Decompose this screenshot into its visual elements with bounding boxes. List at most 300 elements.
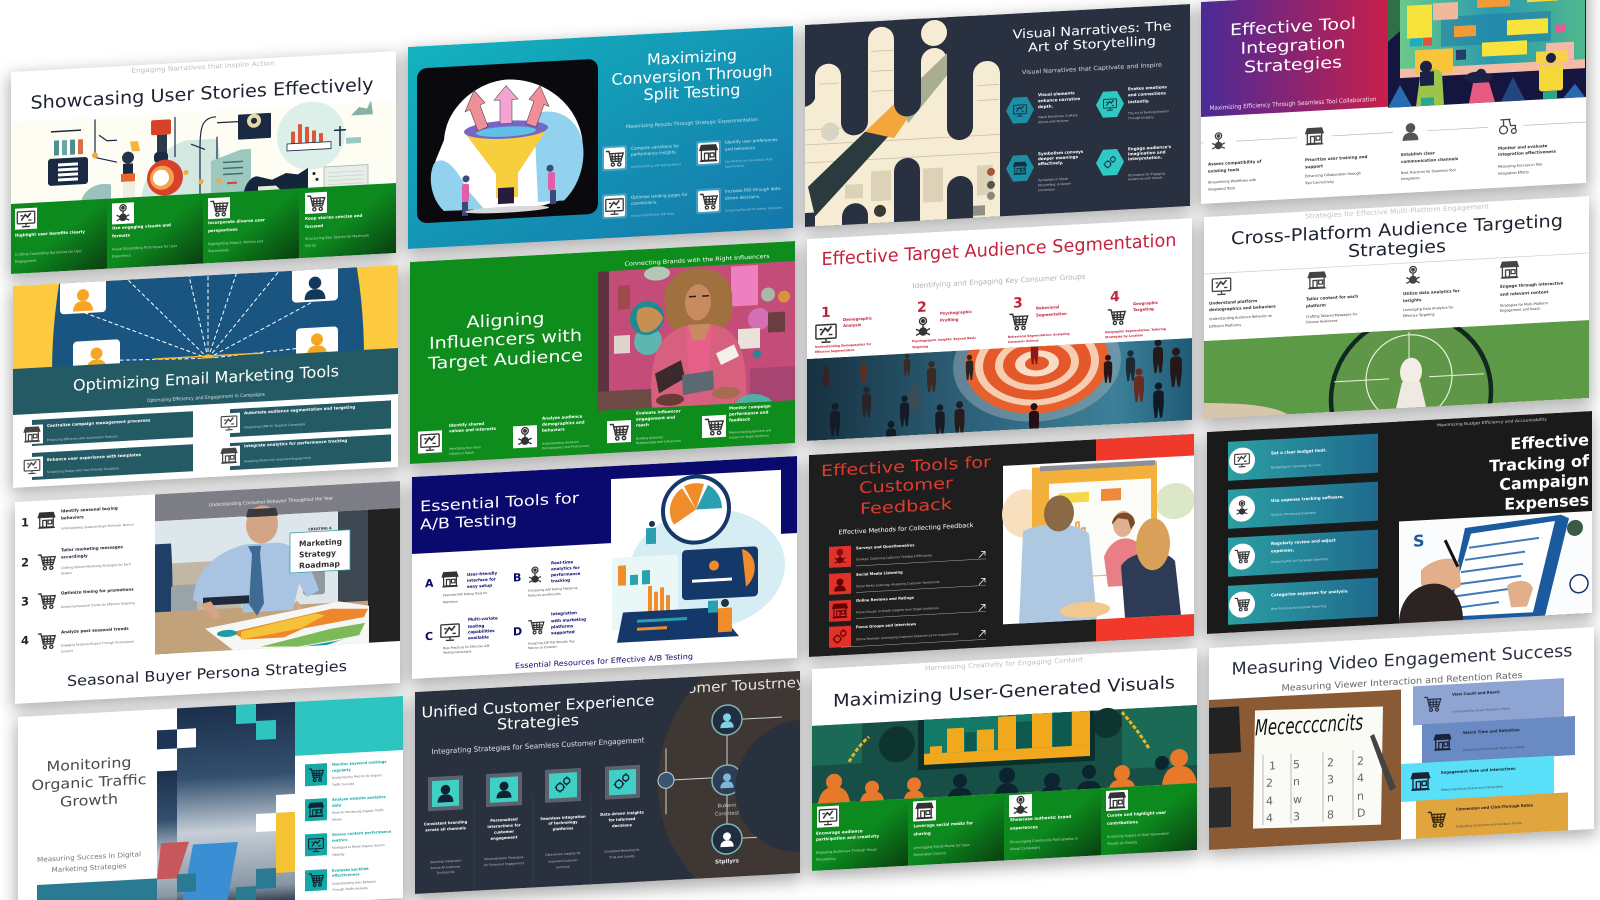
connector lines xyxy=(1201,122,1586,143)
item 3: Visual Campaigns xyxy=(1010,846,1040,851)
item 1: 1 xyxy=(21,515,29,530)
subtitle: Maximizing Budget Efficiency and Accountability xyxy=(1437,416,1548,427)
step 4: Trust and Loyalty xyxy=(608,854,635,859)
item 1: Identify seasonal buying xyxy=(61,505,118,513)
item 4: Measuring Success in Tool xyxy=(1498,162,1542,169)
row 3 xyxy=(829,592,986,622)
item 2: Leverage social media for xyxy=(914,820,973,828)
item 2: Identify user preferences xyxy=(725,137,777,145)
photo: notepad on desk: 4 xyxy=(1266,812,1273,825)
item 2: Enhance user experience with templates xyxy=(47,452,142,462)
roadmap card: Roadmap xyxy=(299,559,340,571)
item 1 xyxy=(1006,92,1080,124)
step 3: platforms xyxy=(553,825,574,831)
photo: notepad on desk: 1 xyxy=(1269,759,1276,773)
title: Growth xyxy=(60,792,118,811)
item 3: Evaluate influencer xyxy=(636,408,681,416)
step 4: Data-driven insights xyxy=(600,809,645,817)
row 3: Online Reviews and Ratings xyxy=(856,596,915,603)
item 1 xyxy=(21,505,134,533)
item 1: behaviors xyxy=(61,514,84,520)
item 1: Integrated Tools xyxy=(1208,186,1235,192)
photo: notepad on desk: w xyxy=(1293,793,1302,806)
title: Effective Target Audience Segmentation xyxy=(822,230,1177,270)
item 3: perspectives xyxy=(208,227,238,233)
item 4: Impact on Target Audience xyxy=(729,433,769,440)
item C: Multi-variate xyxy=(468,615,498,622)
item D: Analyzing A/B Test Results: Key xyxy=(528,639,575,646)
step 2 xyxy=(912,297,976,349)
item 1: Visual elements xyxy=(1038,90,1075,97)
item 2: Key Metrics for Conversion Rate xyxy=(725,157,773,164)
subtitle: Optimizing Efficiency and Engagement in Campaigns xyxy=(147,392,266,404)
item 2 xyxy=(1306,270,1358,324)
title: Expenses xyxy=(1504,490,1589,514)
item 3: Strategies to Boost Organic Search xyxy=(332,843,385,850)
item 3: Relationships with Influencers xyxy=(636,439,681,445)
title: Feedback xyxy=(860,494,953,518)
title: Tracking of xyxy=(1489,451,1590,476)
step 1: Effective Segmentation xyxy=(815,348,855,354)
footer caption: Essential Resources for Effective A/B Testing xyxy=(515,652,693,670)
bar 3: expenses. xyxy=(1271,547,1295,554)
item 3: conversions. xyxy=(631,199,657,206)
row 1 xyxy=(829,538,986,568)
title: Campaign xyxy=(1499,470,1589,494)
item B: tracking xyxy=(551,577,570,583)
item 4: 4 xyxy=(21,633,29,648)
row 2: Social Media Listening: Analyzing Customer Sentiments xyxy=(856,580,940,588)
row 1: Surveys and Questionnaires xyxy=(856,543,915,550)
image: crowd around target xyxy=(807,297,1192,459)
item 3 xyxy=(1009,791,1078,851)
item A: Essential A/B Testing Tools for xyxy=(443,591,488,597)
item 2: Generated Content xyxy=(914,851,947,857)
step 1 xyxy=(424,775,468,876)
title: Strategies xyxy=(497,711,579,734)
step 1: Demographic xyxy=(843,315,873,322)
item 3 xyxy=(607,408,681,447)
slide 11: Effective Tools for Customer Feedback xyxy=(809,434,1195,657)
step 3: 3 xyxy=(1013,295,1023,312)
step 3: Consumer Actions xyxy=(1008,338,1039,344)
item 2: formats xyxy=(112,232,131,238)
card 2: Analyzing Click-Through Rates for Videos xyxy=(1463,745,1525,752)
title: Influencers with xyxy=(429,326,582,353)
item 2 xyxy=(513,413,589,452)
item 1 xyxy=(1208,130,1262,192)
item 3: Best Practices for Seamless Tool xyxy=(1401,168,1456,175)
bottom-left block xyxy=(37,878,157,900)
feature columns xyxy=(11,183,396,274)
step 1: Seamless Integration xyxy=(430,858,462,864)
subtitle: Measuring Viewer Interaction and Retention Rates xyxy=(1282,671,1523,694)
item 3: Incorporate diverse user xyxy=(208,217,265,225)
item 2: Tailor content for each xyxy=(1306,294,1358,301)
item 4: focused xyxy=(305,223,323,229)
item 1: Understanding A/B Testing Basics xyxy=(631,162,682,169)
title: Visual Narratives: The xyxy=(1013,18,1172,42)
roadmap card xyxy=(290,525,350,573)
photo: notepad on desk: D xyxy=(1357,806,1365,820)
item 1: Influencer Match xyxy=(449,451,474,456)
title: Maximizing User-Generated Visuals xyxy=(833,673,1175,712)
item 3: Optimize timing for promotions xyxy=(61,587,134,595)
card 4 xyxy=(1416,792,1568,839)
item 4: performance and xyxy=(729,409,769,417)
item 1: Analyzing Key Metrics for Organic xyxy=(332,773,383,780)
photo: notepad on desk: 3 xyxy=(1293,810,1300,823)
item 1: Understand platform xyxy=(1209,298,1257,306)
item 4: Engage audience's xyxy=(1128,144,1172,151)
bar 1: Set a clear budget limit. xyxy=(1271,447,1327,456)
title: Conversion Through xyxy=(612,62,772,89)
bar 4: Categorize expenses for analysis. xyxy=(1271,588,1349,598)
item 3: Symbolism in Visual xyxy=(1038,177,1068,182)
item 4: Structuring User Stories for Maximum xyxy=(305,233,370,241)
item 1: participation and creativity xyxy=(816,833,879,842)
item 4 xyxy=(1498,117,1556,176)
item 3: metrics xyxy=(332,838,348,843)
item B: Features and Benefits xyxy=(528,592,561,598)
item 2 xyxy=(1304,126,1368,185)
item 4 xyxy=(305,866,377,893)
subtitle: Measuring Success in Digital xyxy=(37,850,141,864)
subtitle: Maximizing Efficiency Through Seamless Tool Collaboration xyxy=(1209,96,1377,112)
item 1: values and interests xyxy=(449,426,497,433)
item 2 xyxy=(112,200,178,258)
item 4 xyxy=(702,403,771,441)
item 3 xyxy=(1006,150,1083,192)
item A: User-friendly xyxy=(467,570,497,577)
photo: man at table with roadmap xyxy=(155,500,369,654)
title: A/B Testing xyxy=(420,511,517,534)
photo: notepad on desk: 2 xyxy=(1266,777,1273,790)
roadmap card: CREATING A xyxy=(308,526,332,532)
item 1: enhance narrative xyxy=(1038,96,1080,103)
item 4: Analyzing Impact of User-Generated xyxy=(1107,832,1169,839)
illustration: machinery xyxy=(11,97,396,208)
bar 2: Tools for Monitoring Expenses xyxy=(1270,511,1316,517)
item 2: Understanding Audience xyxy=(542,440,579,446)
title band xyxy=(13,348,398,415)
item 1: Crafting Compelling Narratives for User xyxy=(15,249,82,257)
step 2: for Enhanced Engagement xyxy=(484,861,525,867)
step 2: Psychographic Insights: Beyond Basic xyxy=(912,336,976,343)
slide 1: Showcasing User Stories xyxy=(11,51,396,274)
bar 4 xyxy=(1228,578,1378,625)
item B: Real-time xyxy=(551,559,573,565)
item 3 xyxy=(305,830,392,858)
step 1: across all channels xyxy=(425,825,467,832)
item 2: Visual Storytelling Techniques for User xyxy=(112,244,178,251)
title: Monitoring xyxy=(46,755,132,775)
row 4 xyxy=(829,618,986,648)
item 1: performance insights. xyxy=(631,149,677,157)
row 2: Social Media Listening xyxy=(856,570,903,577)
item 2: Optimization xyxy=(725,164,744,169)
item 4: Engage through interactive xyxy=(1500,280,1564,289)
item 4: Increase ROI through data- xyxy=(725,186,782,194)
item 4: imagination and xyxy=(1128,149,1166,156)
item 4 xyxy=(218,434,391,471)
item 3: Utilize data analytics for xyxy=(1403,288,1460,296)
item 3: Establish clear xyxy=(1401,150,1435,157)
item 4 xyxy=(696,185,782,214)
card 2: Watch Time and Retention xyxy=(1463,727,1520,735)
blurred photo with pixel squares xyxy=(157,702,295,900)
navy header xyxy=(412,456,797,554)
slide 8: Cross-Platform Audience Targeting xyxy=(1204,196,1589,487)
item 2: Analyze audience xyxy=(542,414,583,421)
pill collage image xyxy=(805,16,1000,227)
item 3: Highlighting Impact: Metrics and xyxy=(208,239,263,246)
photo: notepad on desk: n xyxy=(1327,791,1334,805)
item 2: Tools for Monitoring Organic Traffic xyxy=(331,808,384,815)
item 2: Evokes emotions xyxy=(1128,84,1167,91)
step 2 xyxy=(484,772,525,867)
step 4 xyxy=(600,764,645,860)
photo: notepad on desk: n xyxy=(1293,775,1300,788)
subtitle xyxy=(37,850,141,875)
item 1: Enhancing Efficiency with Automation Features xyxy=(47,434,118,442)
item 3: Effective Targeting xyxy=(1403,312,1435,318)
item 4: Techniques for Engaging xyxy=(1127,171,1165,177)
step 4: decisions xyxy=(612,822,633,828)
item 4: Curate and highlight user xyxy=(1107,810,1166,818)
roadmap card: Marketing xyxy=(299,537,342,549)
item 3: 3 xyxy=(21,594,29,609)
item 4: Strategies for Multi-Platform xyxy=(1500,301,1549,308)
photo: notepad on desk: 4 xyxy=(1266,795,1273,808)
slide 9: Seasonal Buyer Persona Strategies xyxy=(15,481,400,704)
photo: influencer xyxy=(598,259,795,411)
item 2: Demographics and Preferences xyxy=(542,444,589,450)
bar 3: Analyzing ROI on Campaign Spending xyxy=(1271,557,1328,564)
subtitle: Understanding Consumer Behavior Throughout the Year xyxy=(209,496,333,508)
title: Seasonal Buyer Persona Strategies xyxy=(67,659,347,690)
item B: analytics for xyxy=(551,565,580,571)
item 3: deeper meanings xyxy=(1038,154,1079,161)
subtitle: Visual Narratives that Captivate and Inspire xyxy=(1022,63,1162,76)
step 1: Consistent branding xyxy=(424,819,468,827)
item A xyxy=(425,570,497,605)
item 4: Analyze past seasonal trends xyxy=(61,626,129,634)
photo: notepad on desk: 5 xyxy=(1293,758,1300,771)
item A: interface for xyxy=(467,576,496,583)
item 2: Simplifying Design with User-Friendly Templates xyxy=(47,466,119,474)
item 2: data xyxy=(332,803,342,808)
item 3 xyxy=(602,190,688,219)
item 1: Encourage audience xyxy=(816,828,863,836)
step 4: Strategies by Location xyxy=(1105,333,1143,339)
journey map image: Customer Toustrney xyxy=(653,675,805,699)
slide 7: Effective Target Audience Segmentation xyxy=(807,218,1192,459)
journey map image: Corontest xyxy=(715,810,739,818)
item 4: Clarity xyxy=(305,243,316,248)
photo: notepad on desk: 8 xyxy=(1327,808,1334,822)
item 3: Analyzing Seasonal Trends for Effective Targeting xyxy=(61,601,135,609)
slide 10: Essential Tools for A/B Testing xyxy=(412,456,797,679)
item 2: sharing xyxy=(914,831,931,836)
item C: available xyxy=(468,634,489,640)
title: Showcasing User Stories Effectively xyxy=(31,74,374,114)
item 3: Showcase authentic brand xyxy=(1010,814,1071,822)
item 3: engagement and xyxy=(636,415,675,422)
item 1 xyxy=(15,205,85,264)
subtitle: Harnessing Creativity for Engaging Content xyxy=(925,656,1083,672)
item 4: Visuals on Brands xyxy=(1107,840,1137,846)
item B: Comparing A/B Testing Platforms: xyxy=(528,586,578,593)
feature columns xyxy=(812,783,1197,871)
item D: platforms xyxy=(551,623,574,629)
step 4 xyxy=(1105,286,1166,339)
item 1 xyxy=(602,142,682,171)
item A: easy setup xyxy=(467,583,492,589)
photo: notepad on desk xyxy=(1209,690,1401,850)
item 1: Highlight user benefits clearly xyxy=(15,229,85,238)
card 4: Evaluating Comments and Feedback Trends xyxy=(1456,821,1522,829)
title: Split Testing xyxy=(643,81,740,104)
item 2: The Art of Evoking Emotion xyxy=(1127,109,1169,115)
item 4: and relevant content xyxy=(1500,289,1549,297)
title xyxy=(821,452,992,520)
item C: testing xyxy=(468,623,484,629)
subtitle: Strategies for Effective Multi-Platform Engagement xyxy=(1305,202,1489,220)
item 4: Measuring Engagement and xyxy=(729,428,771,435)
title xyxy=(427,307,583,373)
item 2: behaviors xyxy=(542,427,565,433)
step 4: Consistent Branding for xyxy=(604,848,641,854)
slide 13: Monitoring Organic Traffic Growth xyxy=(18,696,403,900)
step 1 xyxy=(815,302,873,354)
title xyxy=(32,754,147,812)
journey map image: Stpllyrs xyxy=(715,858,740,866)
item 2: Experience xyxy=(112,253,131,258)
title xyxy=(1231,211,1563,269)
item 1: Monitor keyword rankings xyxy=(332,760,387,767)
item 2 xyxy=(913,798,973,857)
illustration: wall of screens xyxy=(1388,0,1586,108)
item 4 xyxy=(1500,259,1564,313)
item 4: Engagement and Reach xyxy=(1500,307,1541,313)
item 2: Crafting Tailored Marketing Strategies for Each xyxy=(61,562,131,570)
subtitle: Engaging Narratives that Inspire Action xyxy=(132,59,275,75)
item 3: Assess content performance xyxy=(332,830,392,837)
item 2 xyxy=(1096,86,1169,120)
teal corner block xyxy=(295,696,403,756)
subtitle: Maximizing Results Through Strategic Experimentation xyxy=(626,117,758,130)
item 3 xyxy=(21,586,135,611)
item 1: regularly xyxy=(332,768,351,773)
step 2: Personalization Strategies xyxy=(484,855,524,861)
card 3: Engagement Rate and Interactions xyxy=(1441,766,1516,775)
title: Unified Customer Experience xyxy=(421,691,654,722)
step 2: 2 xyxy=(917,299,927,316)
item 4: Engaging Seasonal Buyers Through Personalized xyxy=(61,640,134,647)
bar 2 xyxy=(1228,482,1378,529)
item 3: Integrating CRM for Targeted Campaigns xyxy=(244,422,306,429)
title: Strategies xyxy=(1244,52,1342,77)
item 2: support xyxy=(1305,163,1323,169)
image: magnifier and pawn xyxy=(1204,306,1589,487)
step 4: Geographic xyxy=(1133,300,1159,306)
item 1 xyxy=(1209,276,1276,329)
title: Cross-Platform Audience Targeting xyxy=(1231,211,1563,250)
item 3: effectively. xyxy=(1038,160,1064,166)
item 1 xyxy=(418,420,497,458)
step 3: Journeys xyxy=(556,865,570,869)
item 4: Monitor and evaluate xyxy=(1498,143,1548,151)
dark side block xyxy=(368,508,400,643)
step 2: Targeting xyxy=(912,344,928,349)
row 1: Surveys: Capturing Customer Feedback Effectively xyxy=(856,553,932,561)
bar 3: Regularly review and adjust xyxy=(1271,537,1336,546)
item 3: Symbolism conveys xyxy=(1038,149,1084,156)
step 3: Behavioral Segmentation: Analyzing xyxy=(1008,332,1070,339)
roadmap card: Strategy xyxy=(299,549,336,560)
title: Organic Traffic xyxy=(32,772,147,794)
row 4: Focus Groups and Interviews xyxy=(856,622,917,629)
item 1: Storytelling xyxy=(816,857,835,862)
item 4 xyxy=(1106,788,1169,846)
item 1: Engagement xyxy=(15,259,37,264)
item 2 xyxy=(21,444,193,481)
item 3 xyxy=(207,195,265,253)
card 4: Conversion and Click-Through Rates xyxy=(1456,802,1534,812)
item 1: existing tools xyxy=(1208,167,1240,174)
title: Strategies xyxy=(1348,237,1446,262)
item 3: Analyzing Effective A/B Tests xyxy=(631,211,675,218)
subtitle: Identifying and Engaging Key Consumer Groups xyxy=(912,272,1086,290)
slide 4: Effective Tool Integration xyxy=(1201,0,1586,204)
card 3 xyxy=(1401,756,1554,802)
item 4: Content xyxy=(61,649,74,653)
item 2: accordingly xyxy=(61,553,88,559)
item D: Integration xyxy=(551,610,577,616)
title: Art of Storytelling xyxy=(1028,33,1156,55)
item 1: Understanding Seasonal Buyer Behavior Metrics xyxy=(61,523,134,530)
title xyxy=(1232,16,1354,72)
row 2 xyxy=(829,565,986,595)
title: Effective Tool xyxy=(1230,14,1356,39)
item 4: feedback xyxy=(729,416,750,423)
item 1: Understanding Audience Behavior on xyxy=(1209,314,1272,321)
bar 1 xyxy=(1228,434,1378,481)
step 4: for informed xyxy=(609,816,636,822)
item 3: Storytelling: A Deeper xyxy=(1038,181,1072,187)
title: Integration xyxy=(1240,33,1345,58)
step 3: Improved Customer xyxy=(548,858,579,864)
card 1: Understanding Viewer Retention Rates xyxy=(1452,707,1510,714)
photo: notepad on desk: 4 xyxy=(1357,772,1364,785)
item 4: Evaluate backlink xyxy=(332,867,369,873)
item 3: Optimize landing pages for xyxy=(631,192,688,200)
image: signing a checklist: S xyxy=(1413,531,1425,551)
item 2: Prioritize user training and xyxy=(1305,154,1368,162)
step 2: Profiling xyxy=(940,317,959,323)
title xyxy=(420,490,580,534)
top band xyxy=(155,481,400,521)
photo: notepad on desk: 2 xyxy=(1327,756,1334,770)
journey map image xyxy=(653,625,944,900)
item 3 xyxy=(1401,121,1459,181)
item 2: Leveraging Social Media for User- xyxy=(914,843,971,850)
image: audience watching bar chart xyxy=(812,703,1197,804)
item 3: Leveraging Data Analytics for xyxy=(1403,305,1454,312)
step 3: of technology xyxy=(548,819,578,826)
subtitle: Integrating Strategies for Seamless Customer Engagement xyxy=(431,735,645,756)
